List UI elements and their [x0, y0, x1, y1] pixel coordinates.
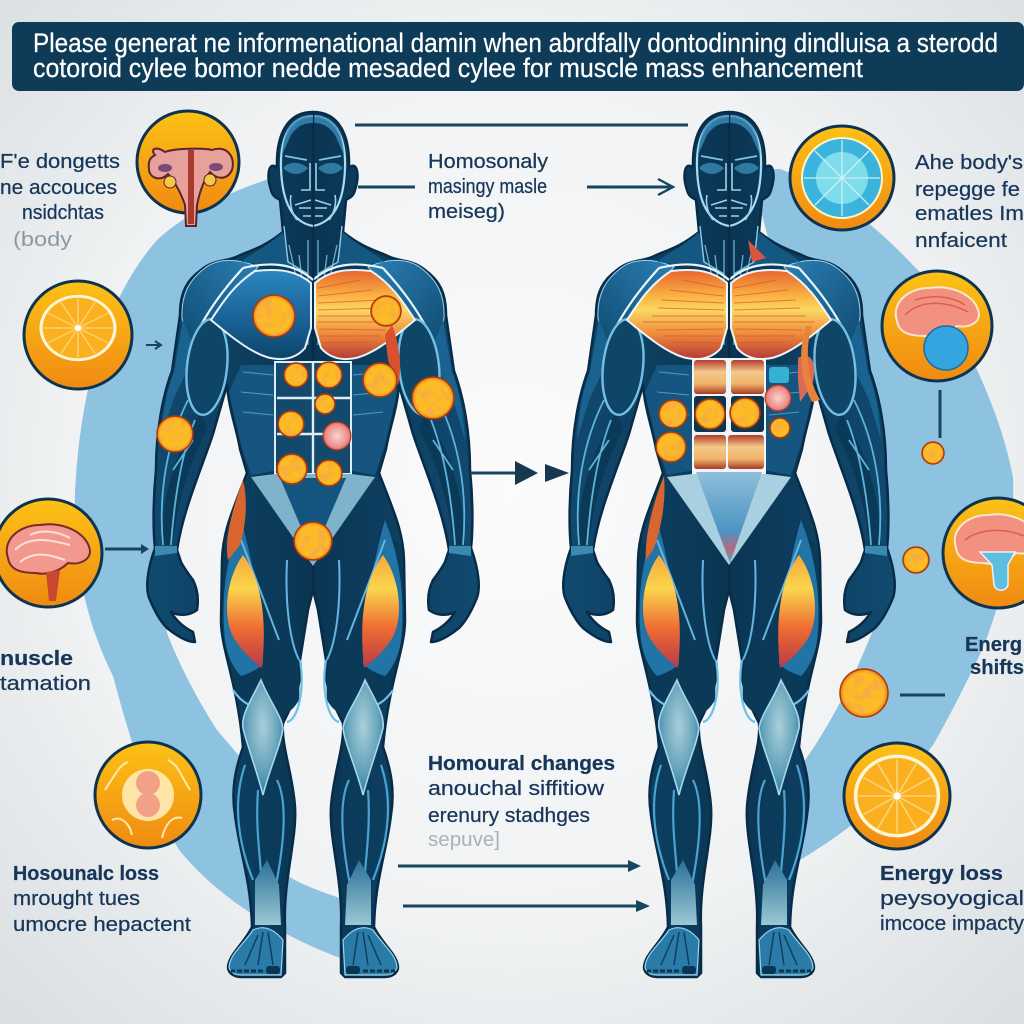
- label: bottom left: mrought tues: [13, 888, 140, 910]
- label: bottom centre: [428, 753, 615, 851]
- right figure chest, orange pectorals: [627, 270, 831, 359]
- left figure chest, blue pectoral: [211, 270, 311, 359]
- connector lines and arrows: [105, 125, 945, 912]
- icon: citrus slice right: [844, 743, 950, 849]
- title banner: cotoroid cylee bomor nedde mesaded cylee for muscle mass enhancement: [33, 53, 863, 83]
- hormone orbs on left figure: [157, 295, 454, 560]
- label: top centre: Homosonaly: [428, 151, 548, 173]
- right blue ring arc: [750, 169, 1013, 860]
- label: right middle: shifts: [970, 657, 1024, 679]
- left blue ring arc: [75, 170, 340, 958]
- label: right middle: Energ: [965, 634, 1022, 656]
- label: top left: [0, 151, 120, 251]
- pink orb on left figure: [323, 422, 351, 450]
- title banner: [12, 22, 1024, 91]
- right figure abdominals: [667, 358, 791, 565]
- label: bottom right: peysoyogical: [880, 888, 1024, 910]
- central arrow heads: [515, 461, 569, 485]
- label: top left: F'e dongetts: [0, 151, 120, 173]
- left body figure: [147, 112, 479, 977]
- right figure arm accent: [801, 326, 820, 402]
- label: bottom right: imcoce impacty: [880, 913, 1024, 935]
- label: top centre: [428, 151, 548, 223]
- label: top right: ematles Im: [915, 203, 1024, 225]
- label: top right: Ahe body's: [915, 152, 1023, 174]
- icon: uterus: [137, 111, 239, 226]
- label: left middle: [0, 648, 91, 695]
- label: bottom right: [880, 863, 1024, 935]
- right figure thigh heat patches: [643, 476, 815, 668]
- label: bottom centre: Homoural changes: [428, 753, 615, 775]
- icon: blue citrus: [790, 126, 894, 230]
- label: top left: nsidchtas: [22, 202, 104, 224]
- label: top right: [915, 152, 1024, 252]
- blue cell: [769, 367, 789, 383]
- label: top centre: masingy masle: [428, 176, 547, 198]
- right body figure: [563, 112, 895, 977]
- left figure abdomen: [251, 362, 375, 566]
- label: bottom left: umocre hepactent: [13, 914, 191, 936]
- hormone orbs on right figure: [656, 398, 944, 717]
- label: bottom centre: anouchal siffitiow: [428, 778, 605, 800]
- right figure shoulder accent: [748, 240, 766, 262]
- label: bottom left: Hosounalc loss: [13, 863, 159, 885]
- icon: brain with blue lobe: [882, 271, 992, 381]
- icon: brain left: [0, 499, 102, 607]
- left figure thigh heat patches: [227, 480, 399, 668]
- label: bottom centre: erenury stadhges: [428, 805, 590, 827]
- label: top left: (body: [13, 229, 72, 251]
- label: top right: repegge fe: [915, 179, 1020, 201]
- label: top right: nnfaicent: [915, 230, 1008, 252]
- label: top centre: meiseg): [428, 201, 505, 223]
- label: top left: ne accouces: [0, 177, 117, 199]
- label: right middle: [965, 634, 1024, 679]
- label: bottom centre: sepuve]: [428, 829, 500, 851]
- left figure chest, orange pectoral: [315, 270, 415, 385]
- label: left middle: tamation: [0, 673, 91, 695]
- icon: brain with stem: [943, 498, 1024, 608]
- label: bottom right: Energy loss: [880, 863, 1003, 885]
- pink orb on right figure: [765, 385, 791, 411]
- icon: citrus slice left: [24, 281, 132, 389]
- label: left middle: nuscle: [0, 648, 73, 670]
- icon: nerve burst: [95, 742, 201, 848]
- label: bottom left: [13, 863, 191, 936]
- right figure side organ detail: [798, 356, 814, 402]
